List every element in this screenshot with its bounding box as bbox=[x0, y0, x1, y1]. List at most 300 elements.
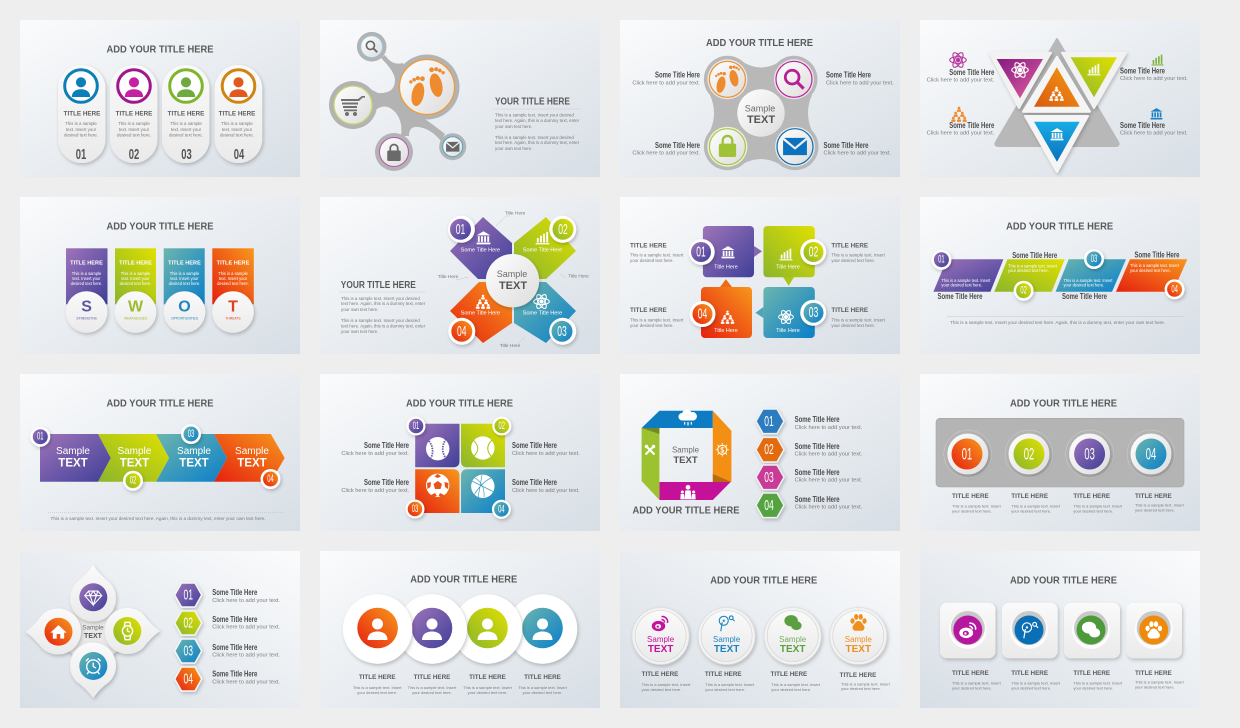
hexagon list: Click here to add your text. bbox=[212, 625, 280, 631]
text block bbox=[339, 280, 426, 334]
diamond 02: Some Title Here bbox=[523, 247, 562, 253]
badge 04: 04 bbox=[267, 473, 274, 485]
arrow 03 bbox=[156, 434, 227, 482]
badge 04: 04 bbox=[498, 503, 505, 515]
tile: tennis ball bbox=[461, 424, 505, 467]
side text: This is a sample text. Insert bbox=[630, 252, 684, 258]
center circle bbox=[486, 254, 539, 307]
band 03: This is a sample text. Insert bbox=[1064, 278, 1113, 283]
hexagon list: Some Title Here bbox=[212, 670, 258, 678]
arrow 01 bbox=[40, 434, 111, 482]
diamond 02 bbox=[514, 217, 576, 279]
S column bbox=[66, 248, 108, 333]
captions: TITLE HERE bbox=[952, 493, 989, 500]
pill 04: desired text here. bbox=[220, 132, 254, 138]
badge 01 bbox=[689, 239, 715, 265]
pill 02: This is a sample bbox=[118, 121, 150, 126]
callouts: Click here to add your text. bbox=[1120, 130, 1188, 136]
hexagon list: 04 bbox=[764, 497, 774, 514]
node: search bbox=[361, 36, 383, 58]
W column: TITLE HERE bbox=[119, 260, 152, 266]
text block: This is a sample text. Insert your desired bbox=[495, 135, 574, 140]
outer labels: Title Here bbox=[438, 274, 459, 280]
text block: your own text here. bbox=[341, 307, 378, 312]
captions: TITLE HERE bbox=[705, 671, 742, 678]
slide 4: triangles bbox=[920, 20, 1200, 177]
captions: TITLE HERE bbox=[642, 671, 678, 678]
side text: TITLE HERE bbox=[630, 242, 667, 250]
slide 12: panel of buttons bbox=[920, 374, 1200, 531]
captions: TITLE HERE bbox=[1135, 493, 1172, 500]
diamond 04 bbox=[450, 282, 512, 343]
band titles: Some Title Here bbox=[1134, 250, 1180, 260]
diamond 01: Some Title Here bbox=[461, 247, 500, 253]
hexagon list: 02 bbox=[183, 614, 193, 632]
tile 04 bbox=[1126, 603, 1182, 658]
W column: WEAKNESSES bbox=[124, 316, 148, 320]
callouts: Click here to add your text. bbox=[341, 451, 409, 457]
band 03: your desired text here. bbox=[1064, 282, 1104, 288]
slide 15: social seals bbox=[620, 551, 900, 708]
captions: your desired text here. bbox=[357, 690, 397, 695]
callouts: Some Title Here bbox=[364, 441, 409, 450]
captions: your desired text here. bbox=[771, 687, 811, 692]
outer labels: Title Here bbox=[505, 210, 526, 216]
T column: T bbox=[228, 298, 238, 316]
pill 03: text. Insert your bbox=[171, 127, 202, 132]
O column: desired text here. bbox=[169, 281, 200, 286]
badge 04 bbox=[690, 301, 716, 327]
footer note: This is a sample text. Insert your desired text here. Again, this is a dummy text, enter your own text here. bbox=[50, 516, 266, 521]
callouts: Click here to add your text. bbox=[824, 151, 892, 157]
tile 02 bbox=[1002, 603, 1058, 658]
seal 01 bbox=[632, 608, 689, 664]
captions: TITLE HERE bbox=[952, 670, 989, 677]
callouts bbox=[927, 51, 1188, 136]
band titles bbox=[938, 250, 1180, 301]
box 01 bbox=[703, 226, 762, 277]
captions: This is a sample text. Insert bbox=[518, 685, 568, 690]
callouts: Some Title Here bbox=[512, 441, 557, 450]
seal 04: TEXT bbox=[846, 644, 871, 655]
slide 8: parallelograms bbox=[920, 197, 1200, 354]
badge 02: 02 bbox=[130, 475, 136, 487]
captions: This is a sample text. Insert bbox=[705, 682, 755, 687]
badge 03: 03 bbox=[809, 304, 818, 321]
hexagon list: Some Title Here bbox=[795, 495, 840, 504]
triangle top right bbox=[1062, 53, 1126, 108]
T column bbox=[212, 248, 254, 333]
badge 02 bbox=[123, 471, 143, 491]
hexagon list: Click here to add your text. bbox=[212, 653, 280, 659]
pill 02 bbox=[110, 65, 158, 163]
pill 03 bbox=[162, 65, 210, 163]
band 02 bbox=[994, 259, 1065, 292]
title: ADD YOUR TITLE HERE bbox=[406, 398, 513, 410]
W column: desired text here. bbox=[120, 281, 151, 286]
badge 02 bbox=[1014, 281, 1034, 301]
callouts: Some Title Here bbox=[364, 478, 409, 487]
captions: This is a sample text. Insert bbox=[353, 685, 402, 690]
hexagon list: 04 bbox=[183, 670, 193, 688]
diamond 03: Some Title Here bbox=[523, 310, 562, 316]
badge 04: 04 bbox=[1171, 283, 1178, 295]
seal 03 bbox=[764, 608, 821, 664]
captions: This is a sample text. Insert bbox=[463, 685, 513, 690]
band 01: your desired text here. bbox=[941, 282, 982, 288]
hexagon list: 03 bbox=[183, 642, 193, 660]
callouts: Click here to add your text. bbox=[927, 130, 995, 136]
hexagon list: 01 bbox=[764, 413, 774, 430]
hexagon list: Click here to add your text. bbox=[795, 451, 863, 457]
node: cart bbox=[334, 86, 372, 124]
callouts bbox=[341, 441, 580, 494]
badge 02 bbox=[549, 216, 576, 243]
title: ADD YOUR TITLE HERE bbox=[1006, 222, 1113, 232]
triangle bottom bbox=[1025, 116, 1088, 172]
pill 01: text. Insert your bbox=[66, 127, 97, 132]
band 02: your desired text here. bbox=[1008, 268, 1049, 273]
box 04 bbox=[701, 279, 752, 338]
text block: YOUR TITLE HERE bbox=[495, 96, 570, 108]
T column: text. Insert your bbox=[219, 276, 248, 281]
slide 1: four pills with avatars bbox=[20, 20, 300, 177]
diamond 01 bbox=[450, 217, 512, 279]
side text: TITLE HERE bbox=[831, 307, 868, 314]
seal 02: TEXT bbox=[714, 644, 739, 655]
callouts: Some Title Here bbox=[1120, 66, 1165, 76]
disc 01 bbox=[343, 594, 412, 664]
box 01: Title Here bbox=[714, 264, 738, 270]
hexagon list bbox=[175, 583, 280, 691]
badge 02: 02 bbox=[499, 420, 505, 432]
center text bbox=[672, 446, 700, 466]
text block: your own text here. bbox=[341, 329, 378, 334]
center circle: Sample bbox=[497, 269, 527, 279]
box 04: Title Here bbox=[714, 328, 738, 334]
text block: text here. Again, this is a dummy text, enter bbox=[495, 140, 580, 145]
diamond 03 bbox=[514, 282, 576, 343]
title: ADD YOUR TITLE HERE bbox=[1010, 576, 1117, 586]
captions: your desired text here. bbox=[412, 690, 452, 695]
text block: your own text here. bbox=[495, 124, 532, 129]
callouts: Click here to add your text. bbox=[826, 80, 894, 86]
band 01 bbox=[933, 259, 1003, 292]
side text: your desired text here. bbox=[630, 323, 674, 328]
center: sample text bbox=[737, 89, 785, 137]
text block: This is a sample text. Insert your desired bbox=[495, 112, 574, 118]
badge 01 bbox=[448, 216, 475, 243]
captions: TITLE HERE bbox=[1011, 670, 1048, 677]
captions bbox=[952, 493, 1185, 514]
slide 3: four-lobe shape bbox=[620, 20, 900, 177]
pill 01 bbox=[58, 65, 106, 163]
captions: TITLE HERE bbox=[359, 674, 396, 681]
icon: cloud bbox=[678, 410, 697, 426]
button 04 bbox=[1127, 430, 1175, 478]
pill 01: 01 bbox=[76, 146, 86, 163]
callouts: Some Title Here bbox=[824, 141, 869, 150]
petal top bbox=[70, 565, 116, 622]
badge 03: 03 bbox=[557, 323, 567, 340]
hexagon list: Some Title Here bbox=[795, 442, 840, 451]
T column: TITLE HERE bbox=[217, 260, 250, 266]
badge 03 bbox=[1084, 249, 1104, 269]
band 04: This is a sample text. Insert bbox=[1130, 263, 1180, 268]
lobes body bbox=[704, 56, 818, 170]
band 03 bbox=[1056, 259, 1126, 292]
callouts: Click here to add your text. bbox=[512, 488, 580, 494]
badge 03 bbox=[406, 500, 424, 518]
captions: your desired text here. bbox=[1011, 508, 1051, 514]
center text: Sample bbox=[82, 624, 104, 632]
box 02 bbox=[763, 226, 815, 286]
molecule body bbox=[329, 32, 466, 171]
hexagon list: Some Title Here bbox=[212, 643, 258, 652]
icon: family bbox=[680, 485, 696, 499]
captions: This is a sample text. Insert bbox=[1135, 502, 1185, 508]
text block: This is a sample text. Insert your desired bbox=[341, 296, 420, 301]
button 03: 03 bbox=[1084, 444, 1095, 464]
pill 02: desired text here. bbox=[117, 132, 151, 138]
arrow 02 bbox=[98, 434, 169, 482]
W column bbox=[115, 248, 156, 333]
disc 03 bbox=[453, 594, 522, 664]
icon: cutlery bbox=[645, 445, 655, 454]
O column: text. Insert your bbox=[170, 276, 199, 281]
arrow 04 bbox=[214, 434, 285, 482]
text block bbox=[493, 96, 581, 151]
side text: your desired text here. bbox=[630, 258, 674, 263]
side text: This is a sample text. Insert bbox=[831, 252, 886, 258]
pill 02: 02 bbox=[129, 146, 139, 163]
pill 01: This is a sample bbox=[65, 121, 97, 126]
S column: STRENGTHS bbox=[76, 316, 98, 320]
captions: your desired text here. bbox=[1073, 686, 1113, 690]
button 02 bbox=[1005, 430, 1053, 478]
badge 02: 02 bbox=[1020, 285, 1027, 297]
disc 02 bbox=[397, 594, 467, 664]
hexagon list: Click here to add your text. bbox=[795, 504, 863, 510]
badge 04 bbox=[260, 469, 280, 489]
button 04: 04 bbox=[1146, 444, 1156, 464]
arrow 01: TEXT bbox=[58, 457, 88, 469]
badge 01: 01 bbox=[696, 244, 706, 260]
side text: This is a sample text. Insert bbox=[630, 318, 684, 322]
badge 01: 01 bbox=[456, 221, 465, 238]
hexagon list: 02 bbox=[764, 441, 774, 458]
node: mail bbox=[443, 137, 463, 157]
arrow 02: TEXT bbox=[120, 457, 149, 469]
badge 02 bbox=[492, 416, 511, 436]
center text: Sample bbox=[672, 446, 700, 454]
slide 14: overlapping white discs bbox=[320, 551, 600, 708]
captions: TITLE HERE bbox=[1135, 670, 1172, 677]
button 01: 01 bbox=[962, 444, 972, 464]
callouts: Some Title Here bbox=[512, 478, 557, 487]
outer labels: Title Here bbox=[500, 343, 521, 349]
pill 03: TITLE HERE bbox=[168, 110, 204, 118]
slide 7: four callout boxes bbox=[620, 197, 900, 354]
callouts: Click here to add your text. bbox=[512, 451, 580, 457]
hexagon list: Some Title Here bbox=[212, 615, 258, 624]
badge 04: 04 bbox=[698, 306, 707, 322]
pill 03: desired text here. bbox=[169, 132, 203, 138]
node: feet bbox=[707, 59, 747, 99]
grey large triangle bbox=[995, 39, 1119, 146]
node: lock bbox=[380, 138, 408, 166]
box 02: Title Here bbox=[776, 264, 800, 270]
diamond 04: Some Title Here bbox=[461, 310, 500, 316]
captions: This is a sample text. Insert bbox=[952, 680, 1002, 686]
slide 5: SWOT bbox=[20, 197, 300, 354]
arrow 03: TEXT bbox=[179, 457, 209, 469]
badge 03 bbox=[800, 300, 826, 326]
captions: your desired text here. bbox=[1135, 508, 1175, 512]
O column: This is a sample bbox=[170, 271, 200, 276]
callouts bbox=[632, 70, 894, 157]
callouts: Some Title Here bbox=[949, 121, 995, 130]
captions: your desired text here. bbox=[952, 686, 992, 690]
backing diamond bbox=[46, 590, 140, 672]
S column: S bbox=[81, 298, 92, 316]
seal 01: Sample bbox=[647, 635, 675, 644]
hexagon list: 01 bbox=[183, 586, 193, 604]
slide 11: folded octagon bbox=[620, 374, 900, 531]
captions: TITLE HERE bbox=[1011, 493, 1048, 500]
band titles: Some Title Here bbox=[1062, 292, 1107, 301]
captions: This is a sample text. Insert bbox=[1011, 504, 1061, 508]
seal 02: Sample bbox=[713, 635, 741, 644]
title: ADD YOUR TITLE HERE bbox=[106, 222, 214, 232]
captions: TITLE HERE bbox=[414, 674, 450, 681]
hexagon list: Some Title Here bbox=[212, 588, 258, 597]
slide 13: petals and hexagons bbox=[20, 551, 300, 708]
O column: TITLE HERE bbox=[168, 260, 201, 266]
callouts: Click here to add your text. bbox=[1120, 76, 1188, 82]
center text: TEXT bbox=[673, 455, 698, 466]
captions: TITLE HERE bbox=[840, 672, 876, 679]
pill 04: This is a sample bbox=[221, 121, 253, 126]
callouts: Click here to add your text. bbox=[927, 78, 995, 84]
captions: This is a sample text. Insert bbox=[408, 685, 457, 690]
seal 02 bbox=[698, 608, 755, 664]
button 01 bbox=[944, 430, 992, 478]
badge 04 bbox=[492, 500, 511, 519]
O column: OPPORTUNITIES bbox=[171, 316, 199, 320]
captions: your desired text here. bbox=[705, 687, 745, 692]
badge 01 bbox=[406, 416, 426, 436]
center: sample text: TEXT bbox=[747, 114, 775, 126]
tile 01 bbox=[940, 603, 996, 658]
badge 01: 01 bbox=[938, 254, 945, 266]
hexagon list bbox=[756, 409, 863, 518]
badge 03 bbox=[549, 318, 576, 345]
pill 01: desired text here. bbox=[64, 132, 98, 138]
footer note: This is a sample text. Insert your desired text here. Again, this is a dummy text, enter your own text here. bbox=[950, 320, 1165, 325]
title: ADD YOUR TITLE HERE bbox=[1010, 398, 1117, 410]
S column: This is a sample bbox=[72, 271, 102, 276]
T column: desired text here. bbox=[217, 281, 249, 286]
petal bottom bbox=[70, 642, 116, 698]
side text: your desired text here. bbox=[831, 258, 875, 263]
badge 02 bbox=[800, 239, 826, 265]
badge 03: 03 bbox=[188, 428, 194, 440]
text block: text here. Again, this is a dummy text, enter bbox=[341, 301, 426, 306]
captions: TITLE HERE bbox=[524, 674, 561, 681]
captions: TITLE HERE bbox=[469, 674, 506, 681]
O column: O bbox=[178, 298, 191, 316]
box 03 bbox=[756, 287, 815, 338]
pill 01: TITLE HERE bbox=[64, 110, 100, 118]
box 03: Title Here bbox=[776, 328, 800, 334]
captions: This is a sample text. Insert bbox=[1073, 680, 1123, 686]
text block: text here. Again, this is a dummy text, enter bbox=[341, 324, 426, 328]
W column: W bbox=[128, 298, 144, 316]
badge 02: 02 bbox=[809, 244, 818, 260]
W column: text. Insert your bbox=[121, 276, 150, 281]
W column: This is a sample bbox=[121, 271, 151, 276]
hexagon list: 03 bbox=[764, 469, 774, 486]
slide 6: four diamonds around center bbox=[320, 197, 600, 354]
side text bbox=[630, 242, 886, 328]
captions: This is a sample text. Insert bbox=[841, 682, 891, 686]
text block: your own text here. bbox=[495, 146, 532, 151]
triangle top left bbox=[990, 53, 1051, 108]
text block: This is a sample text. Insert your desired bbox=[341, 318, 420, 323]
pill 04 bbox=[215, 65, 262, 163]
S column: TITLE HERE bbox=[70, 260, 103, 266]
callouts: Some Title Here bbox=[655, 70, 700, 80]
title: ADD YOUR TITLE HERE bbox=[706, 38, 813, 49]
badge 01: 01 bbox=[413, 420, 419, 432]
disc 04 bbox=[508, 594, 577, 664]
callouts: Some Title Here bbox=[949, 68, 995, 77]
outer labels: Title Here bbox=[568, 274, 589, 280]
seal 04 bbox=[830, 608, 887, 664]
band titles: Some Title Here bbox=[1012, 251, 1058, 260]
seal 03: TEXT bbox=[780, 644, 805, 655]
S column: text. Insert your bbox=[72, 276, 101, 281]
band 01: This is a sample text. Insert bbox=[941, 278, 991, 283]
badge 01: 01 bbox=[37, 431, 44, 443]
side text: your desired text here. bbox=[831, 323, 875, 328]
side text: This is a sample text. Insert bbox=[831, 318, 886, 322]
slide 16: rounded tiles bbox=[920, 551, 1200, 708]
grey panel bbox=[936, 418, 1184, 487]
tile: baseball bbox=[415, 424, 460, 467]
captions: TITLE HERE bbox=[1073, 493, 1110, 500]
badge 04: 04 bbox=[457, 323, 467, 340]
captions bbox=[952, 670, 1185, 690]
petal left bbox=[26, 608, 81, 654]
badge 01 bbox=[30, 427, 50, 447]
band 04 bbox=[1116, 259, 1187, 292]
pill 04: 04 bbox=[234, 146, 245, 163]
callouts: Some Title Here bbox=[1120, 121, 1165, 130]
seal 03: Sample bbox=[779, 635, 807, 644]
center circle: TEXT bbox=[499, 280, 527, 292]
captions: This is a sample text. Insert bbox=[1073, 504, 1123, 508]
pill 03: 03 bbox=[181, 146, 192, 163]
arrow 02: Sample bbox=[117, 446, 152, 457]
center: sample text: Sample bbox=[745, 104, 775, 114]
button 03 bbox=[1066, 430, 1114, 478]
badge 04 bbox=[448, 318, 475, 345]
pill 02: text. Insert your bbox=[119, 127, 150, 132]
seal 04: Sample bbox=[845, 635, 872, 644]
captions: TITLE HERE bbox=[1073, 670, 1110, 677]
